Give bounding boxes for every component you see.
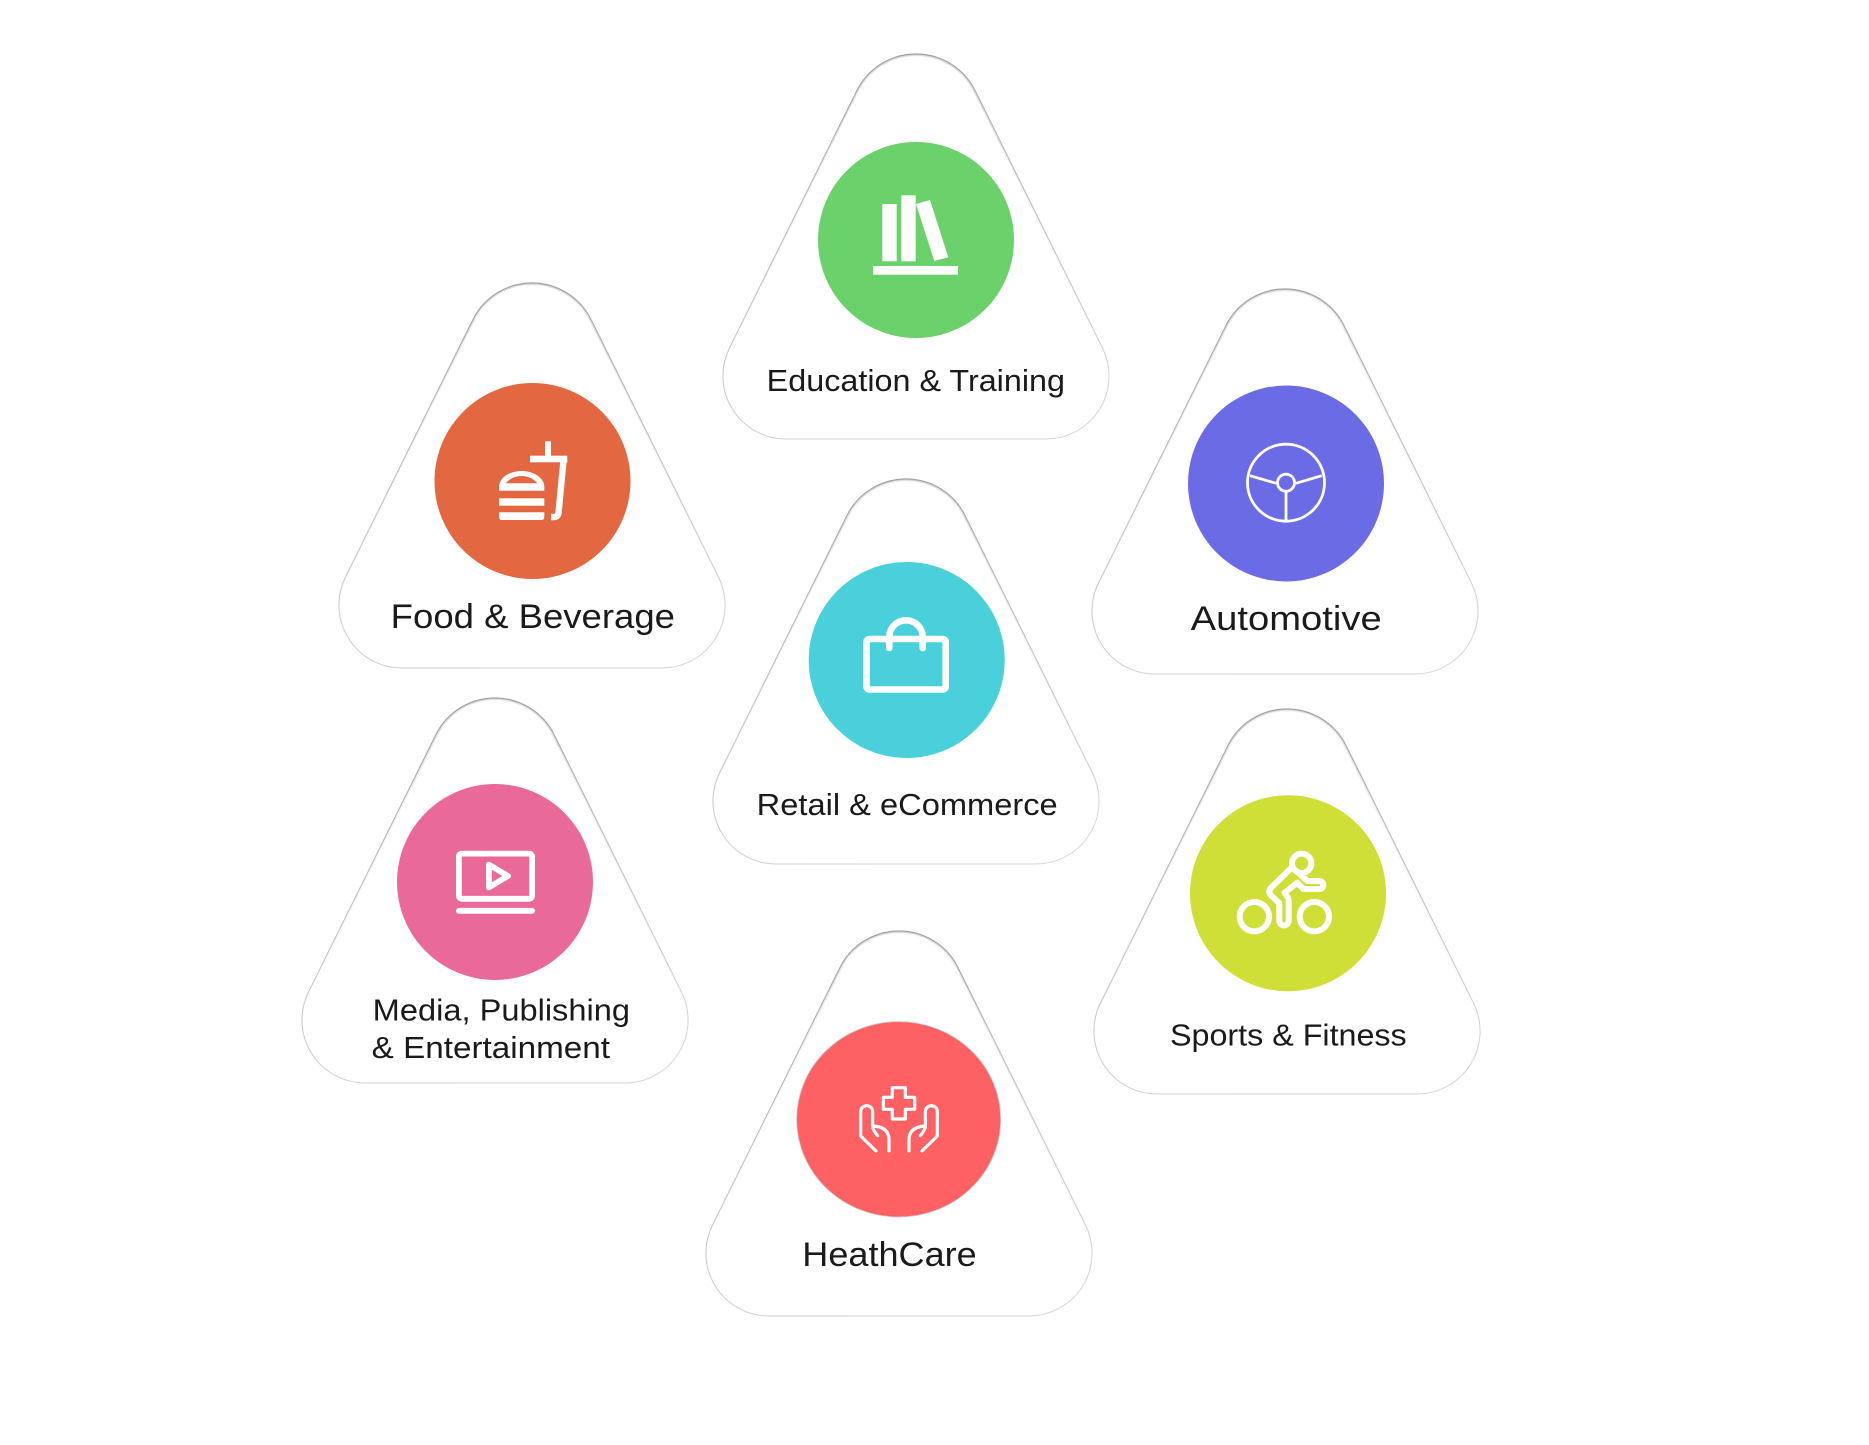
panel: Media, Publishing & Entertainment bbox=[302, 698, 688, 1083]
card outline bbox=[713, 479, 1099, 864]
icon circle bbox=[818, 142, 1014, 338]
panel: Food & Beverage bbox=[339, 283, 725, 668]
card outline bbox=[1092, 289, 1478, 674]
panel: Education & Training bbox=[723, 54, 1109, 439]
icon circle bbox=[809, 562, 1005, 758]
icon: books on a shelf bbox=[873, 195, 958, 275]
label bbox=[372, 993, 630, 1065]
icon: hands holding medical cross bbox=[861, 1088, 937, 1151]
card outline bbox=[723, 54, 1109, 439]
label: Automotive bbox=[1191, 600, 1382, 638]
card outline bbox=[1094, 709, 1480, 1094]
label: & Entertainment bbox=[372, 1030, 610, 1065]
icon: cyclist bbox=[1240, 854, 1329, 931]
panel: Sports & Fitness bbox=[1094, 709, 1480, 1094]
label: Sports & Fitness bbox=[1170, 1018, 1407, 1053]
label: Media, Publishing bbox=[373, 993, 630, 1028]
label: Retail & eCommerce bbox=[757, 787, 1058, 822]
icon: shopping bag bbox=[866, 620, 946, 690]
icon: burger and drink bbox=[499, 441, 567, 520]
label: Education & Training bbox=[767, 363, 1065, 398]
icon circle bbox=[397, 784, 593, 980]
icon circle bbox=[1190, 795, 1386, 991]
card outline bbox=[706, 931, 1092, 1316]
icon circle bbox=[797, 1022, 1001, 1217]
icon circle bbox=[434, 383, 630, 579]
card outline bbox=[339, 283, 725, 668]
icon: steering wheel bbox=[1248, 444, 1324, 521]
card outline bbox=[302, 698, 688, 1083]
icon circle bbox=[1188, 386, 1384, 582]
label: Food & Beverage bbox=[391, 598, 675, 636]
panel: Retail & eCommerce bbox=[713, 479, 1099, 864]
icon: video laptop bbox=[459, 854, 532, 911]
panel: Automotive bbox=[1092, 289, 1478, 674]
label: HeathCare bbox=[802, 1236, 977, 1274]
panel: HeathCare bbox=[706, 931, 1092, 1316]
